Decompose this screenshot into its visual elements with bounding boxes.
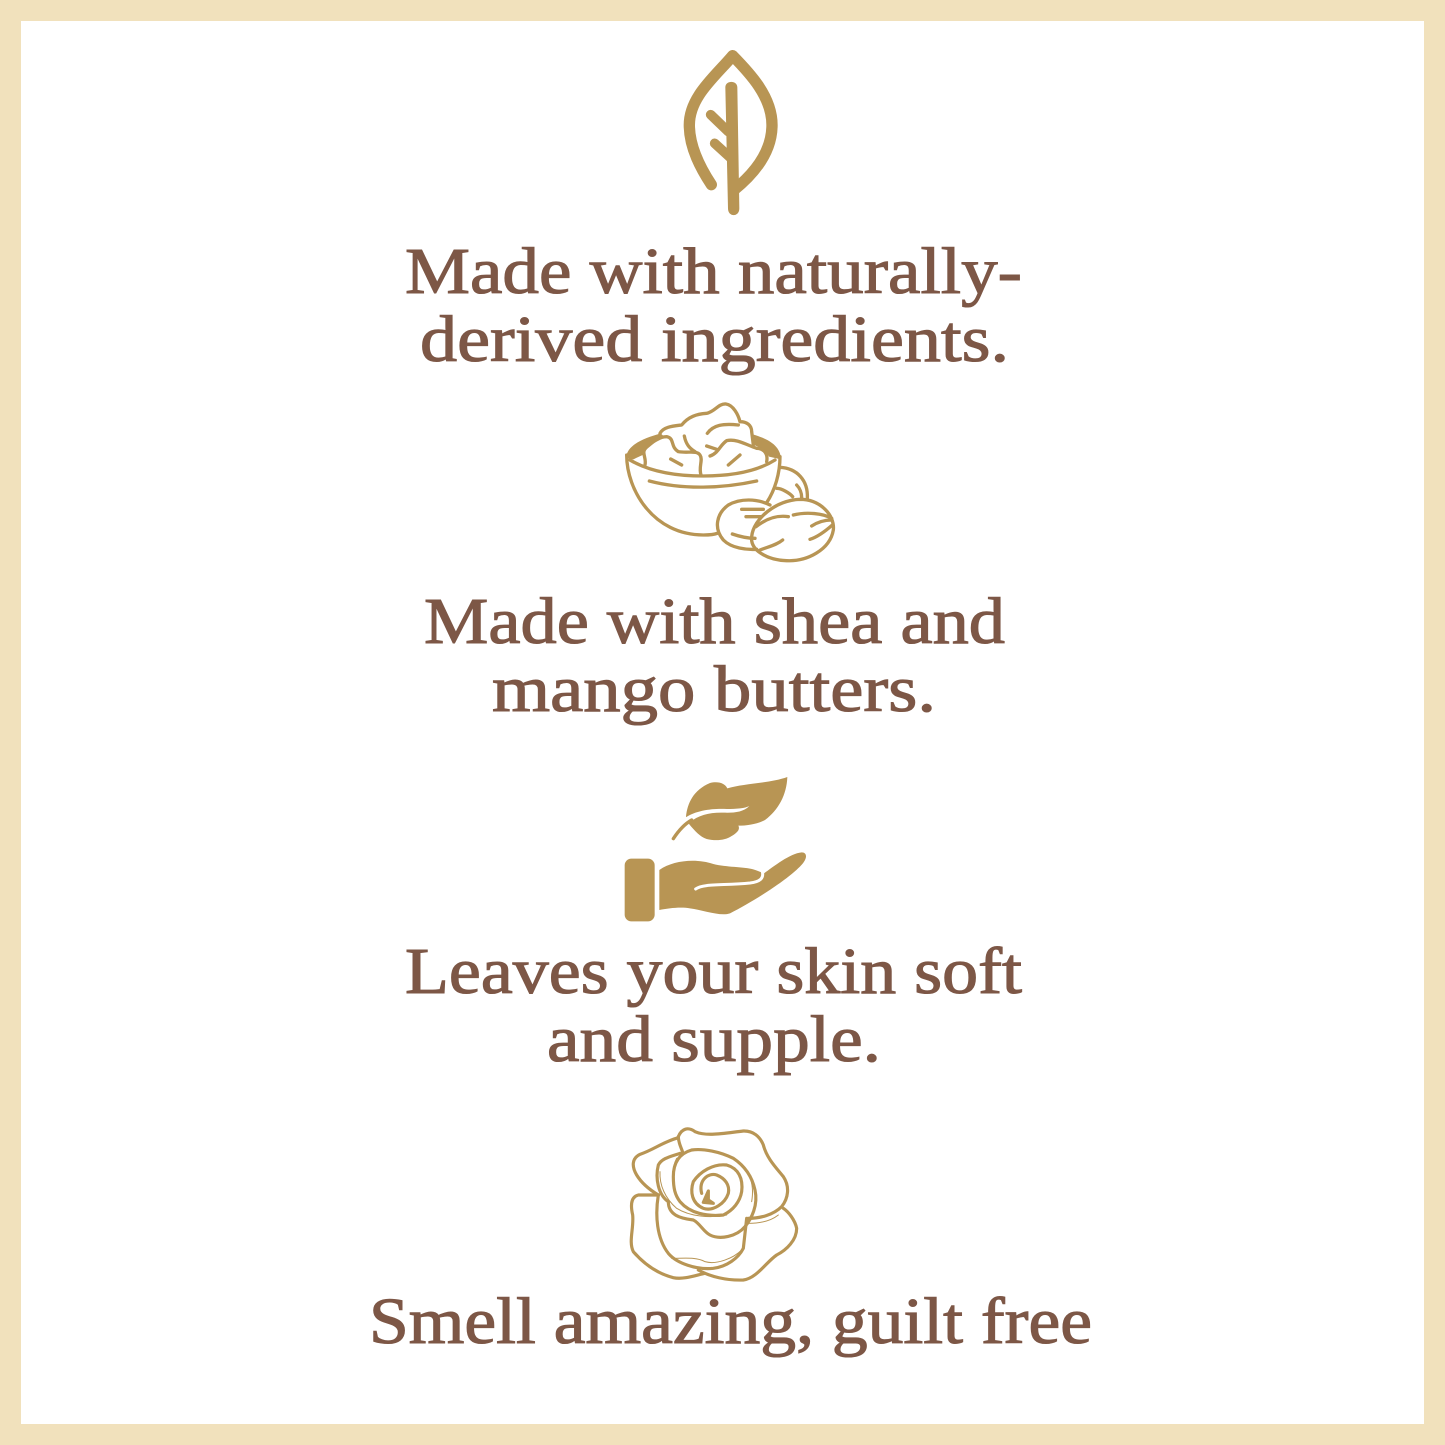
icon: bowl of butter with nuts bbox=[626, 404, 833, 561]
heading: shea and mango butters bbox=[424, 585, 1005, 726]
heading: shea and mango butters: mango butters. bbox=[492, 653, 936, 726]
icon: hand holding leaf bbox=[625, 777, 806, 921]
heading: soft and supple skin: and supple. bbox=[547, 1003, 881, 1076]
heading: naturally-derived ingredients: Made with naturally- bbox=[405, 235, 1022, 308]
heading: soft and supple skin bbox=[405, 935, 1022, 1076]
heading: smell amazing guilt free: Smell amazing, guilt free bbox=[369, 1285, 1092, 1358]
icon: leaf outline bbox=[689, 56, 772, 215]
heading: naturally-derived ingredients bbox=[405, 235, 1022, 376]
heading: soft and supple skin: Leaves your skin soft bbox=[405, 935, 1022, 1008]
heading: naturally-derived ingredients: derived ingredients. bbox=[420, 303, 1009, 376]
icon: rose outline bbox=[631, 1129, 797, 1280]
heading: shea and mango butters: Made with shea and bbox=[424, 585, 1005, 658]
